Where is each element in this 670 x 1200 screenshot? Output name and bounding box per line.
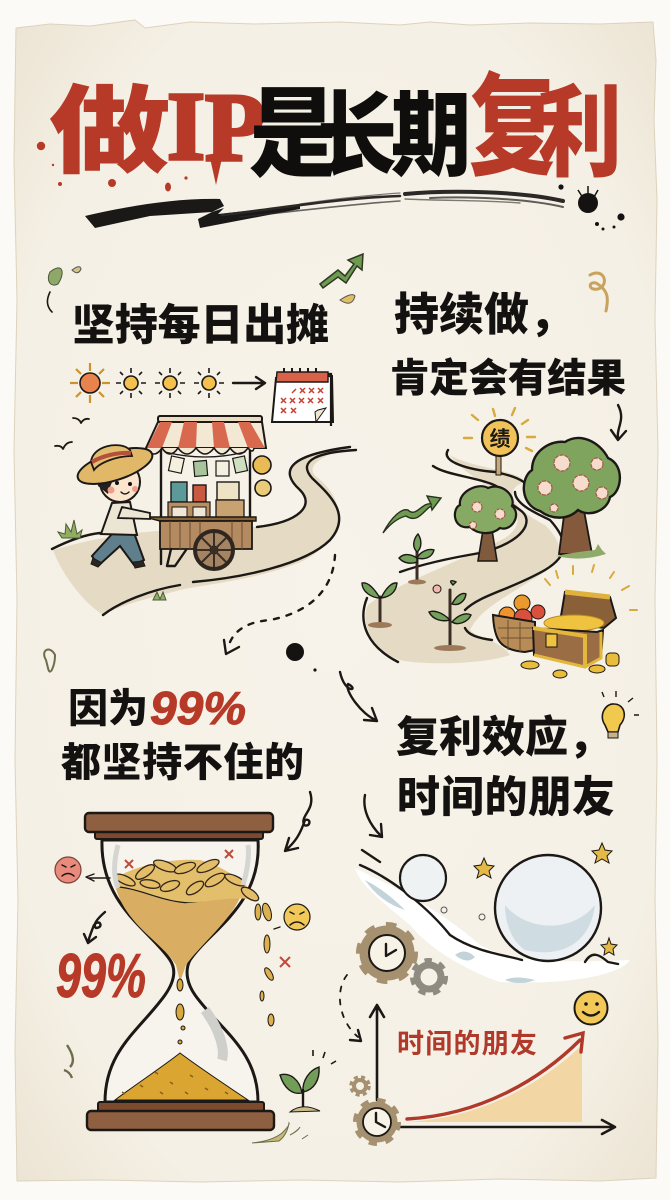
dotted arrow between left sections [224, 555, 335, 672]
heading: 复利效应，时间的朋友: 时间的朋友 [397, 774, 615, 822]
falling grains [255, 902, 275, 1026]
icon row: four suns [70, 363, 224, 403]
title: 利 [538, 52, 622, 197]
heading: 持续做，肯定会有结果: 肯定会有结果 [390, 357, 626, 401]
heading: 复利效应，时间的朋友: ， [568, 714, 611, 762]
title: P [205, 74, 265, 182]
heading: 坚持每日出摊: 坚持每日出摊 [72, 302, 329, 350]
small flowering tree [455, 486, 516, 561]
icon: calendar [272, 368, 333, 426]
birds [55, 418, 89, 449]
swirl arrow to chart 2 [611, 405, 626, 440]
heading: 持续做，肯定会有结果 [390, 289, 626, 401]
title: 复 [469, 37, 555, 199]
icon: light bulb [602, 691, 639, 738]
seedlings [362, 534, 471, 651]
smile icon [574, 992, 608, 1024]
icon: sad yellow face [274, 904, 310, 967]
decorative grains lower left [64, 1045, 73, 1078]
icon: angry red face [55, 857, 110, 883]
heading: 因为99%都坚持不住的: 因为 [68, 687, 148, 731]
boy with straw hat [74, 441, 156, 568]
brush underline with ink splats [37, 142, 625, 230]
heading: 复利效应，时间的朋友: 复利效应 [396, 713, 568, 762]
heading: 持续做，肯定会有结果: ， [529, 289, 574, 340]
swirl arrow to 99% [84, 912, 105, 943]
title: 期 [391, 62, 471, 195]
heading: 因为99%都坚持不住的: 99% [150, 682, 246, 734]
title [49, 37, 622, 199]
big snowball [441, 843, 617, 961]
decorative leaves and upward arrow near headings [47, 254, 607, 312]
origin clock gear [351, 1077, 398, 1143]
sign with 绩 [464, 408, 535, 475]
sprout [252, 1050, 336, 1143]
heading: 因为99%都坚持不住的: 都坚持不住的 [61, 741, 304, 785]
dotted arrow to chart [340, 975, 361, 1041]
heading: 复利效应，时间的朋友 [396, 713, 615, 822]
treasure chest with coins [521, 565, 637, 678]
big 99%: 99% [56, 942, 146, 1011]
title: 长 [317, 62, 397, 195]
hourglass [85, 813, 274, 1130]
small snowball [400, 855, 446, 901]
chart label: 时间的朋友 [397, 1029, 537, 1059]
squiggle and arrow into hourglass section [44, 650, 311, 851]
clock gears [360, 926, 445, 993]
heading: 持续做，肯定会有结果: 持续做 [394, 289, 529, 340]
sign with 绩: 绩 [490, 428, 510, 451]
title: I [167, 73, 205, 181]
title: 是 [249, 55, 337, 197]
snowy slope [355, 850, 630, 983]
heading: 因为99%都坚持不住的 [61, 682, 304, 785]
cart with awning [145, 416, 271, 569]
arrow to snowball section [340, 672, 382, 837]
title: 做 [49, 54, 171, 193]
winding road right [363, 450, 564, 663]
green growth arrow [383, 496, 441, 533]
arrow to calendar [233, 377, 265, 389]
large flowering tree [524, 438, 620, 559]
winding road left [52, 445, 357, 615]
growth chart [370, 1005, 615, 1134]
fruit basket [493, 595, 545, 652]
